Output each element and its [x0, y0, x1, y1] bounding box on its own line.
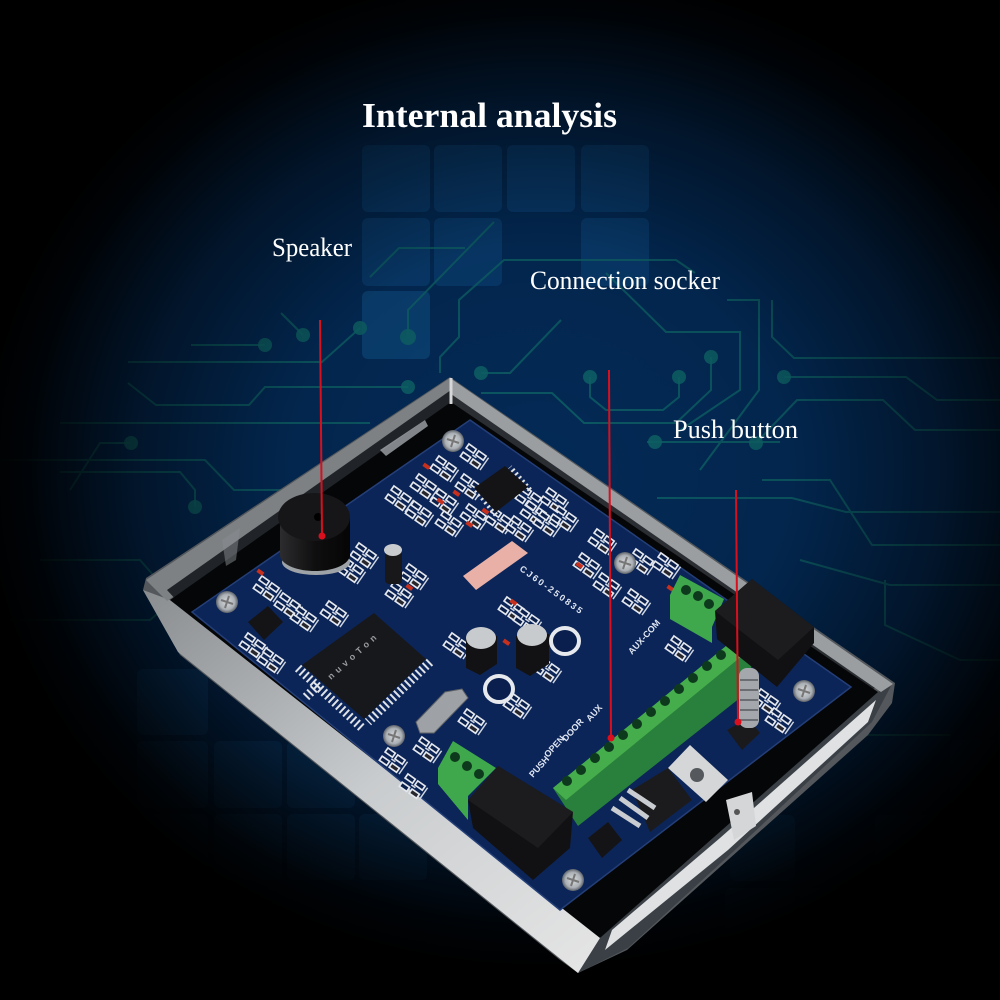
background trace nodes	[124, 321, 791, 514]
voltage regulators	[588, 745, 728, 858]
label: Speaker: Speaker	[272, 233, 352, 262]
relay lower	[468, 766, 573, 880]
background circuit traces	[0, 222, 1000, 735]
ring pads	[485, 628, 579, 702]
small capacitor	[384, 544, 402, 584]
relay upper	[715, 579, 814, 687]
background tiles	[137, 145, 1000, 948]
small IC	[474, 466, 530, 515]
title: Internal analysis	[362, 96, 617, 135]
board silkscreen labels: AUX	[584, 703, 604, 723]
push button with spring	[727, 668, 760, 750]
crystal oscillator	[416, 689, 468, 733]
board silkscreen labels: OPEN	[542, 734, 567, 759]
board silkscreen labels: PUSH	[527, 754, 551, 779]
device: opened controller with circuit board	[143, 377, 895, 973]
board silkscreen labels: DOOR	[560, 716, 586, 743]
circuit board	[192, 420, 851, 910]
device shell	[143, 377, 895, 973]
red diodes	[256, 463, 674, 646]
surface mount component clusters	[239, 444, 794, 800]
green terminal block lower	[438, 741, 496, 820]
pink sticker	[463, 541, 528, 590]
pointer: Push button	[734, 490, 742, 726]
small IC lower left	[248, 606, 283, 640]
green terminal block upper	[670, 575, 724, 643]
pointer: Speaker	[318, 320, 326, 540]
board silkscreen labels: CJ60-250835	[518, 564, 584, 616]
microcontroller chip	[298, 613, 430, 728]
pointer: Connection socker	[608, 370, 614, 742]
board silkscreen labels: AUX-COM	[626, 618, 662, 656]
speaker buzzer	[278, 493, 350, 575]
label: Connection socker: Connection socker	[530, 266, 720, 295]
board silkscreen labels	[518, 564, 662, 779]
green terminal block large	[553, 637, 752, 826]
mounting screws	[216, 430, 815, 891]
microcontroller chip: nuvoTon	[326, 633, 378, 681]
electrolytic capacitors	[466, 624, 549, 676]
label: Push button: Push button	[673, 415, 798, 444]
